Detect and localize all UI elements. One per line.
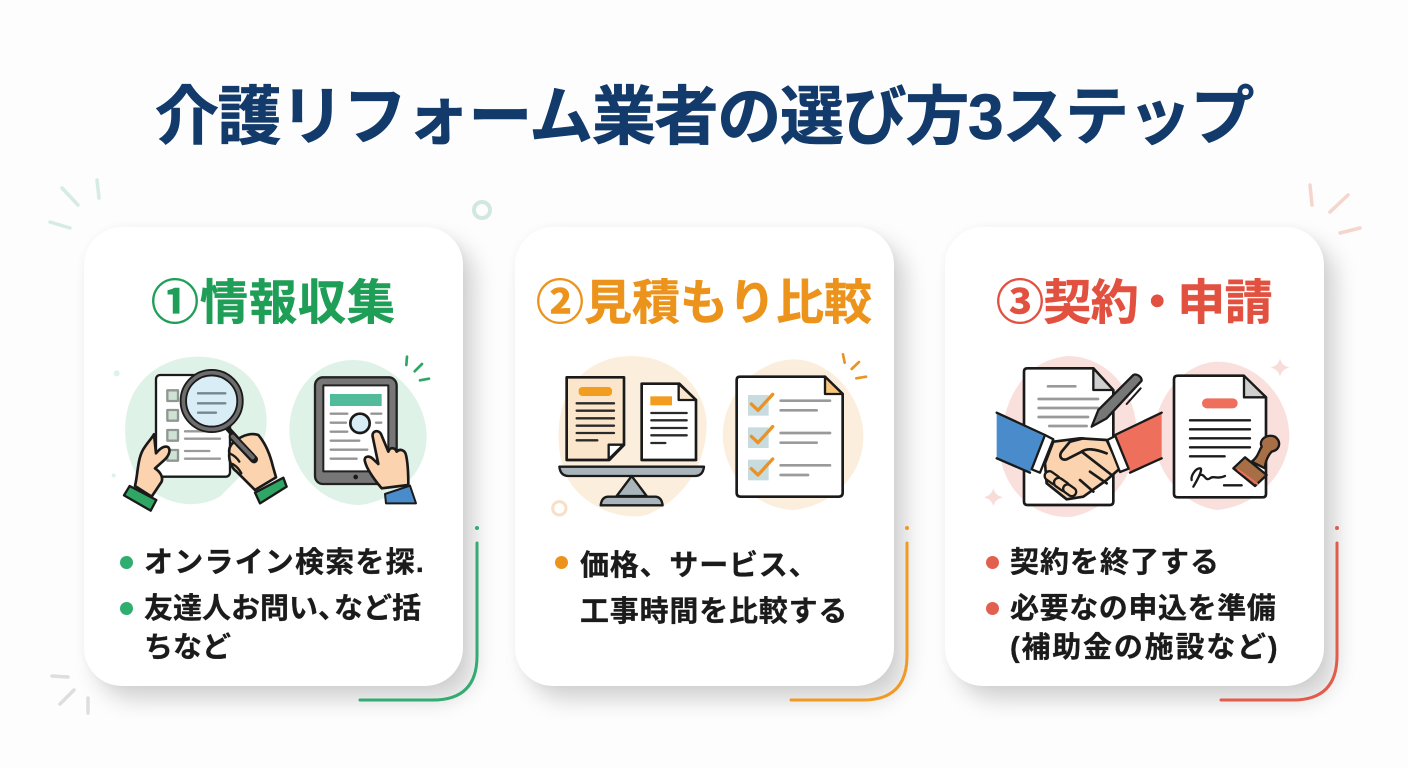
icon: application form with stamp: [1174, 358, 1289, 497]
bullet text: 価格、サービス、: [580, 550, 818, 582]
icon: tablet with pointing hand: [289, 357, 429, 505]
bullet dot 1: [120, 556, 133, 569]
bullet text: [580, 550, 848, 628]
background blob: application form: [1153, 362, 1289, 510]
bullet dot 2: [986, 602, 999, 615]
bullet text: 工事時間を比較する: [580, 596, 848, 628]
bullet dot 2: [120, 602, 133, 615]
bullet text 2: 友達人お問い、など括: [144, 593, 421, 625]
bullet list: step 2: [555, 550, 848, 628]
bullet text 2: ちなど: [144, 632, 231, 664]
icon: two quotes on a balance: [553, 356, 707, 516]
icon: document with magnifier and hands: [112, 357, 287, 511]
bullet text 1: オンライン検索を探.: [144, 547, 425, 579]
accent: red corner line: [1221, 526, 1339, 700]
accent: orange corner line: [791, 526, 909, 700]
title: 介護リフォーム業者の選び方3ステップ: [155, 81, 1253, 153]
heading: step 3: ③契約・申請: [996, 277, 1272, 330]
bullet dot: [555, 556, 568, 569]
bullet list: step 3: [986, 546, 1279, 664]
panel: step 2 card: [515, 227, 894, 686]
bullet text 2: [144, 593, 421, 664]
decoration: top-left rays: [50, 180, 490, 228]
bullet text 2: (補助金の施設など): [1010, 632, 1279, 664]
icon: checklist: [723, 354, 866, 510]
bullet dot 1: [986, 556, 999, 569]
bullet text 2: 必要なの申込を準備: [1010, 593, 1276, 625]
icon: contract, pen and handshake: [984, 356, 1162, 517]
bullet text 2: [1010, 592, 1279, 664]
heading: step 1: ①情報収集: [151, 277, 396, 330]
decoration: top-right rays: [1310, 185, 1360, 233]
accent: green corner line: [360, 526, 479, 700]
panel: step 1 card: [84, 227, 463, 686]
bullet list: step 1: [120, 547, 425, 664]
heading: step 2: ②見積もり比較: [536, 277, 872, 330]
bullet text 1: 契約を終了する: [1010, 547, 1220, 579]
decoration: bottom-left rays: [52, 676, 88, 713]
panel: step 3 card: [945, 227, 1324, 686]
